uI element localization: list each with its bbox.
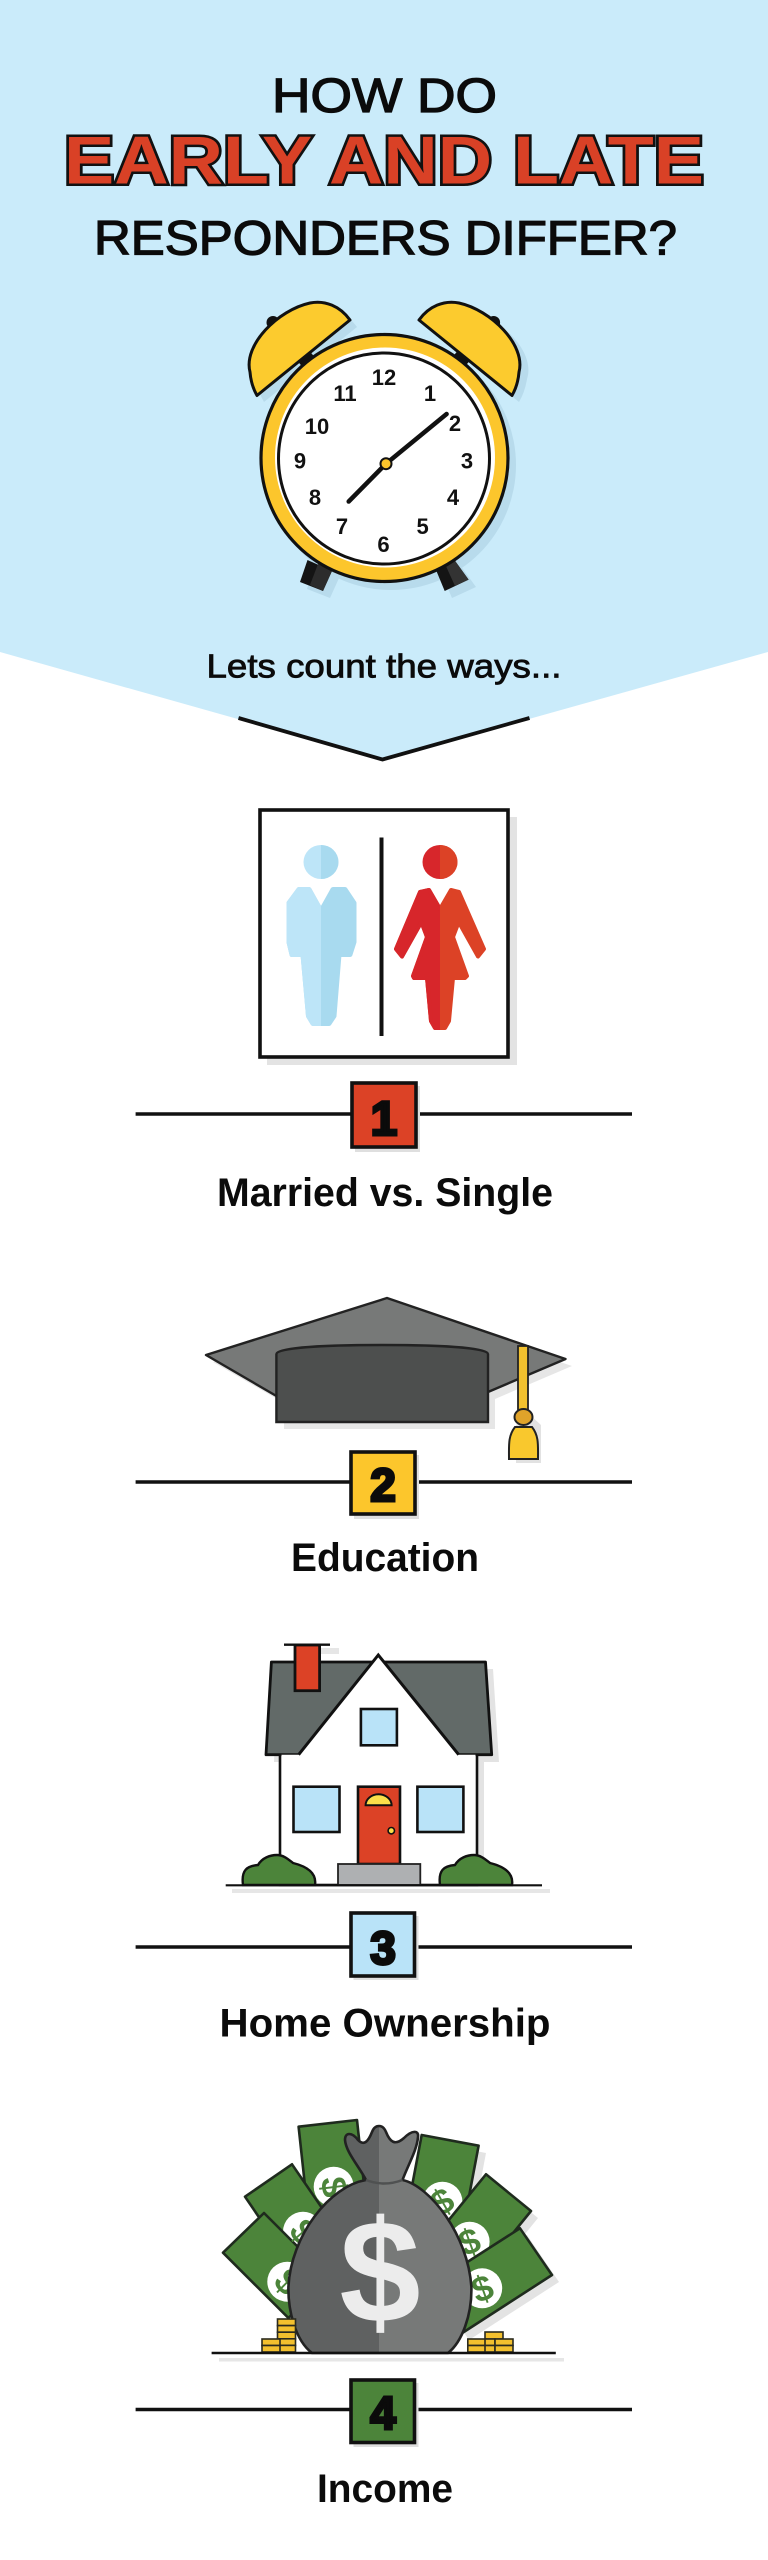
icon: house <box>226 1645 550 1893</box>
icon: money bag with bills: $ <box>266 2260 309 2303</box>
money bag: $ <box>339 2190 421 2353</box>
number badge 4: 4 <box>370 2387 396 2439</box>
icon: money bag with bills: $ <box>423 2179 461 2224</box>
heading: income: Income <box>317 2467 453 2511</box>
icon: alarm clock: 5 <box>416 514 429 539</box>
panel: income <box>136 2120 632 2511</box>
icon: alarm clock: 12 <box>372 365 396 390</box>
panel: home ownership <box>136 1645 632 2046</box>
number badge 4 <box>136 2380 632 2447</box>
icon: money bag with bills: $ <box>466 2266 499 2311</box>
panel: header background <box>0 0 768 760</box>
icon: money bag with bills: $ <box>281 2211 326 2253</box>
icon: alarm clock: 8 <box>309 485 321 510</box>
icon: alarm clock: 1 <box>424 381 436 406</box>
icon: alarm clock: 10 <box>305 414 329 439</box>
bill: right lower <box>430 2228 552 2333</box>
heading: home ownership: Home Ownership <box>220 2002 550 2046</box>
number badge 2 <box>136 1452 632 1519</box>
icon: alarm clock: 11 <box>333 381 357 406</box>
icon: alarm clock <box>249 302 528 598</box>
panel: married vs single <box>136 810 632 1215</box>
icon: money bag with bills <box>212 2120 564 2362</box>
number badge 1: 1 <box>371 1093 397 1146</box>
bill: top left <box>299 2120 370 2247</box>
icon: alarm clock: 6 <box>377 532 390 557</box>
number badge 2: 2 <box>370 1459 396 1511</box>
number badge 3: 3 <box>370 1922 396 1974</box>
heading: education: Education <box>291 1536 479 1580</box>
title: RESPONDERS DIFFER? <box>94 212 677 266</box>
icon: money bag with bills: $ <box>313 2174 356 2199</box>
bill: top right <box>400 2135 479 2262</box>
panel: education <box>136 1298 632 1580</box>
title: EARLY AND LATE <box>64 122 704 198</box>
bill: left upper <box>245 2164 357 2292</box>
arrow: chevron <box>238 718 530 760</box>
title: HOW DO <box>272 70 497 123</box>
icon: alarm clock: 4 <box>447 485 460 510</box>
bill: left lower <box>223 2213 329 2318</box>
icon: alarm clock: 2 <box>449 411 461 436</box>
money bag <box>288 2126 471 2353</box>
coins <box>262 2319 513 2352</box>
icon: money bag with bills: $ <box>453 2219 486 2264</box>
icon: alarm clock: 3 <box>461 448 473 474</box>
bill: right upper <box>426 2174 531 2285</box>
icon: alarm clock: 7 <box>336 514 348 539</box>
number badge 3 <box>136 1913 632 1980</box>
number badge 1 <box>136 1083 632 1152</box>
icon: alarm clock: 9 <box>294 448 306 474</box>
title <box>64 70 704 266</box>
tagline: Lets count the ways... <box>206 648 562 684</box>
heading: married vs single: Married vs. Single <box>217 1171 553 1215</box>
icon: graduation cap <box>206 1298 572 1463</box>
icon: man and woman sign <box>260 810 517 1065</box>
